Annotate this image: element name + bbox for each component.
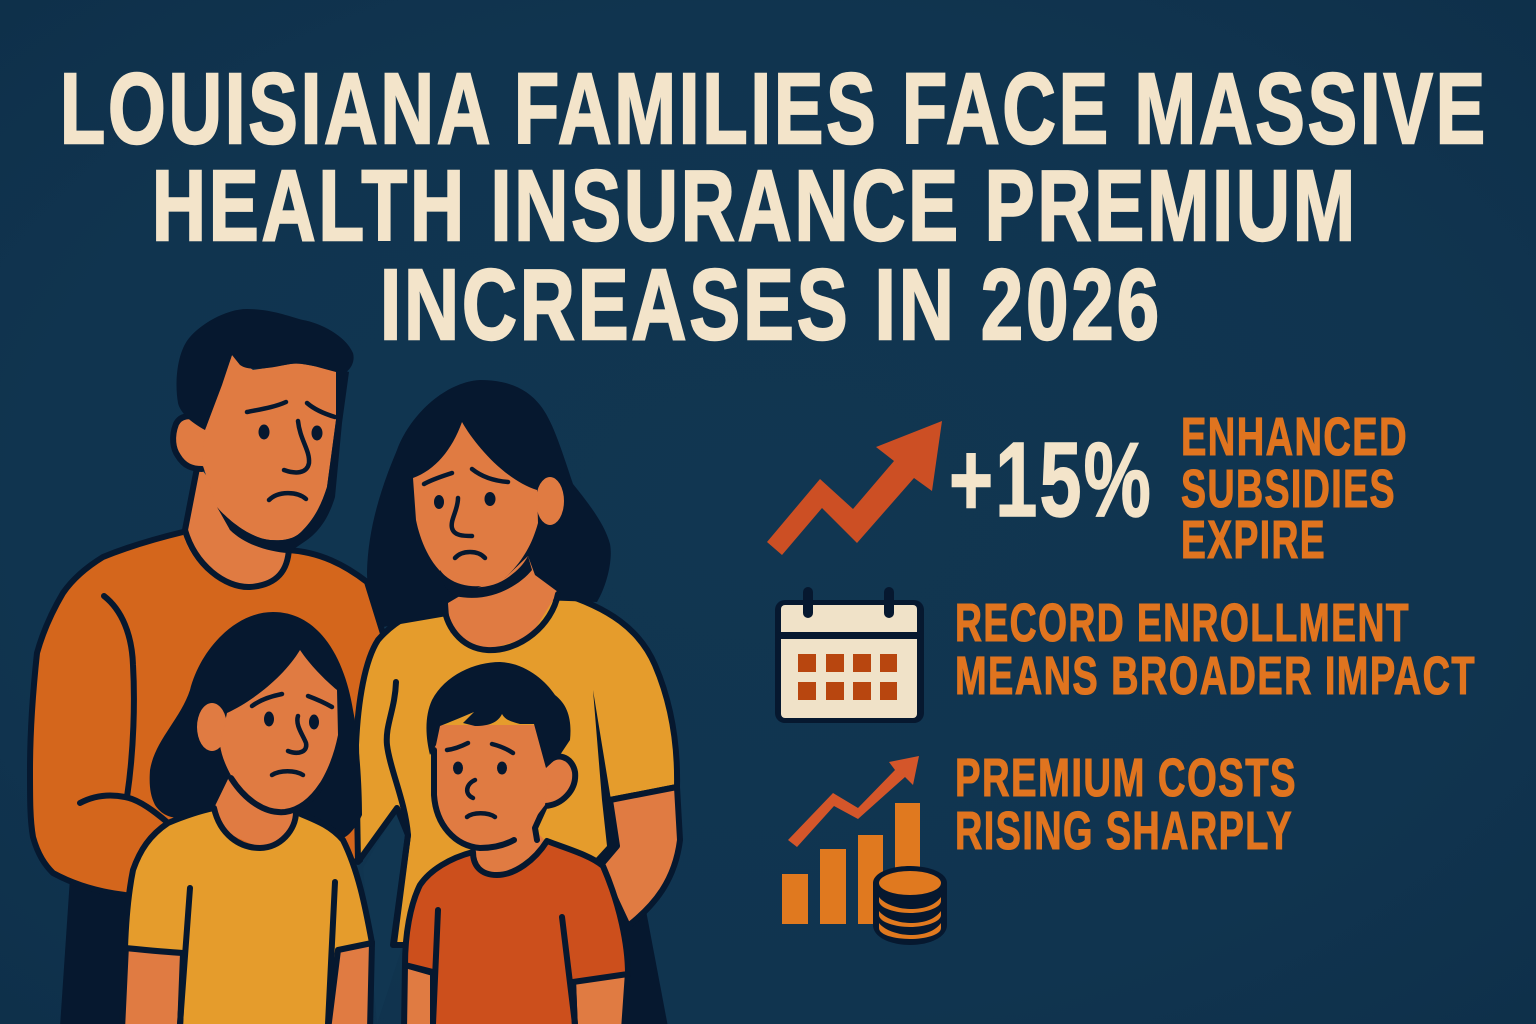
stat: +15%: +15% [949, 421, 1153, 539]
icon: calendar [775, 587, 924, 723]
mother [356, 380, 680, 1024]
father [30, 309, 385, 1024]
icon: bar chart with coins [782, 756, 947, 945]
label: enhanced subsidies expire: ENHANCED [1181, 407, 1408, 467]
label: enhanced subsidies expire: SUBSIDIES [1181, 459, 1396, 519]
boy [404, 662, 628, 1024]
label: enhanced subsidies expire: EXPIRE [1181, 510, 1326, 570]
label: enhanced subsidies expire [1181, 407, 1408, 570]
label: premium costs: RISING SHARPLY [955, 801, 1293, 861]
label: premium costs [955, 748, 1297, 861]
label: record enrollment [955, 593, 1476, 706]
title [60, 53, 1488, 361]
title: INCREASES IN 2026 [380, 249, 1162, 361]
girl [122, 612, 372, 1024]
icon: rising arrow [767, 421, 942, 555]
illustration: worried family [30, 309, 680, 1024]
label: premium costs: PREMIUM COSTS [955, 748, 1297, 808]
